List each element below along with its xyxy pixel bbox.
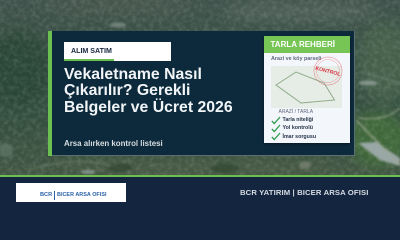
map label: ARAZİ / TARLA <box>278 109 313 115</box>
parcel caption: Arazi ve köy parseli <box>271 56 321 62</box>
item: imar sorgusu: İmar sorgusu <box>282 134 316 140</box>
stamp: KONTROL <box>314 66 341 78</box>
dark title panel with green left edge <box>48 31 355 156</box>
guide card <box>264 36 350 143</box>
tag label: ALIM SATIM <box>71 46 112 54</box>
footer bar <box>0 175 400 210</box>
logo box <box>16 183 126 202</box>
parcel map with stamp <box>271 56 342 108</box>
footer text: BCR YATIRIM | BICER ARSA OFISI <box>240 188 368 197</box>
logo mark: BCR <box>40 192 52 198</box>
checklist <box>271 116 316 140</box>
item: imar sorgusu <box>271 132 316 140</box>
title <box>64 66 233 116</box>
background: aerial photo of farmland <box>0 0 400 175</box>
card heading: TARLA REHBERİ <box>270 40 335 48</box>
item: tarla niteliği: Tarla niteliği <box>282 117 313 123</box>
title: Vekaletname Nasıl <box>64 66 202 83</box>
green accent bar <box>48 31 52 156</box>
category tag <box>64 42 171 61</box>
title: Çıkarılır? Gerekli <box>64 82 190 99</box>
footer green line <box>0 175 400 177</box>
card header <box>264 36 350 53</box>
logo divider <box>53 190 56 200</box>
title: Belgeler ve Ücret 2026 <box>64 99 233 116</box>
item: yol kontrolü <box>271 124 313 132</box>
logo name: BICER ARSA OFISI <box>57 192 107 198</box>
item: yol kontrolü: Yol kontrolü <box>282 125 313 131</box>
subtitle: Arsa alırken kontrol listesi <box>64 138 163 148</box>
tag underline <box>64 58 114 61</box>
parcel outline <box>276 72 334 103</box>
item: tarla niteliği <box>271 116 313 124</box>
